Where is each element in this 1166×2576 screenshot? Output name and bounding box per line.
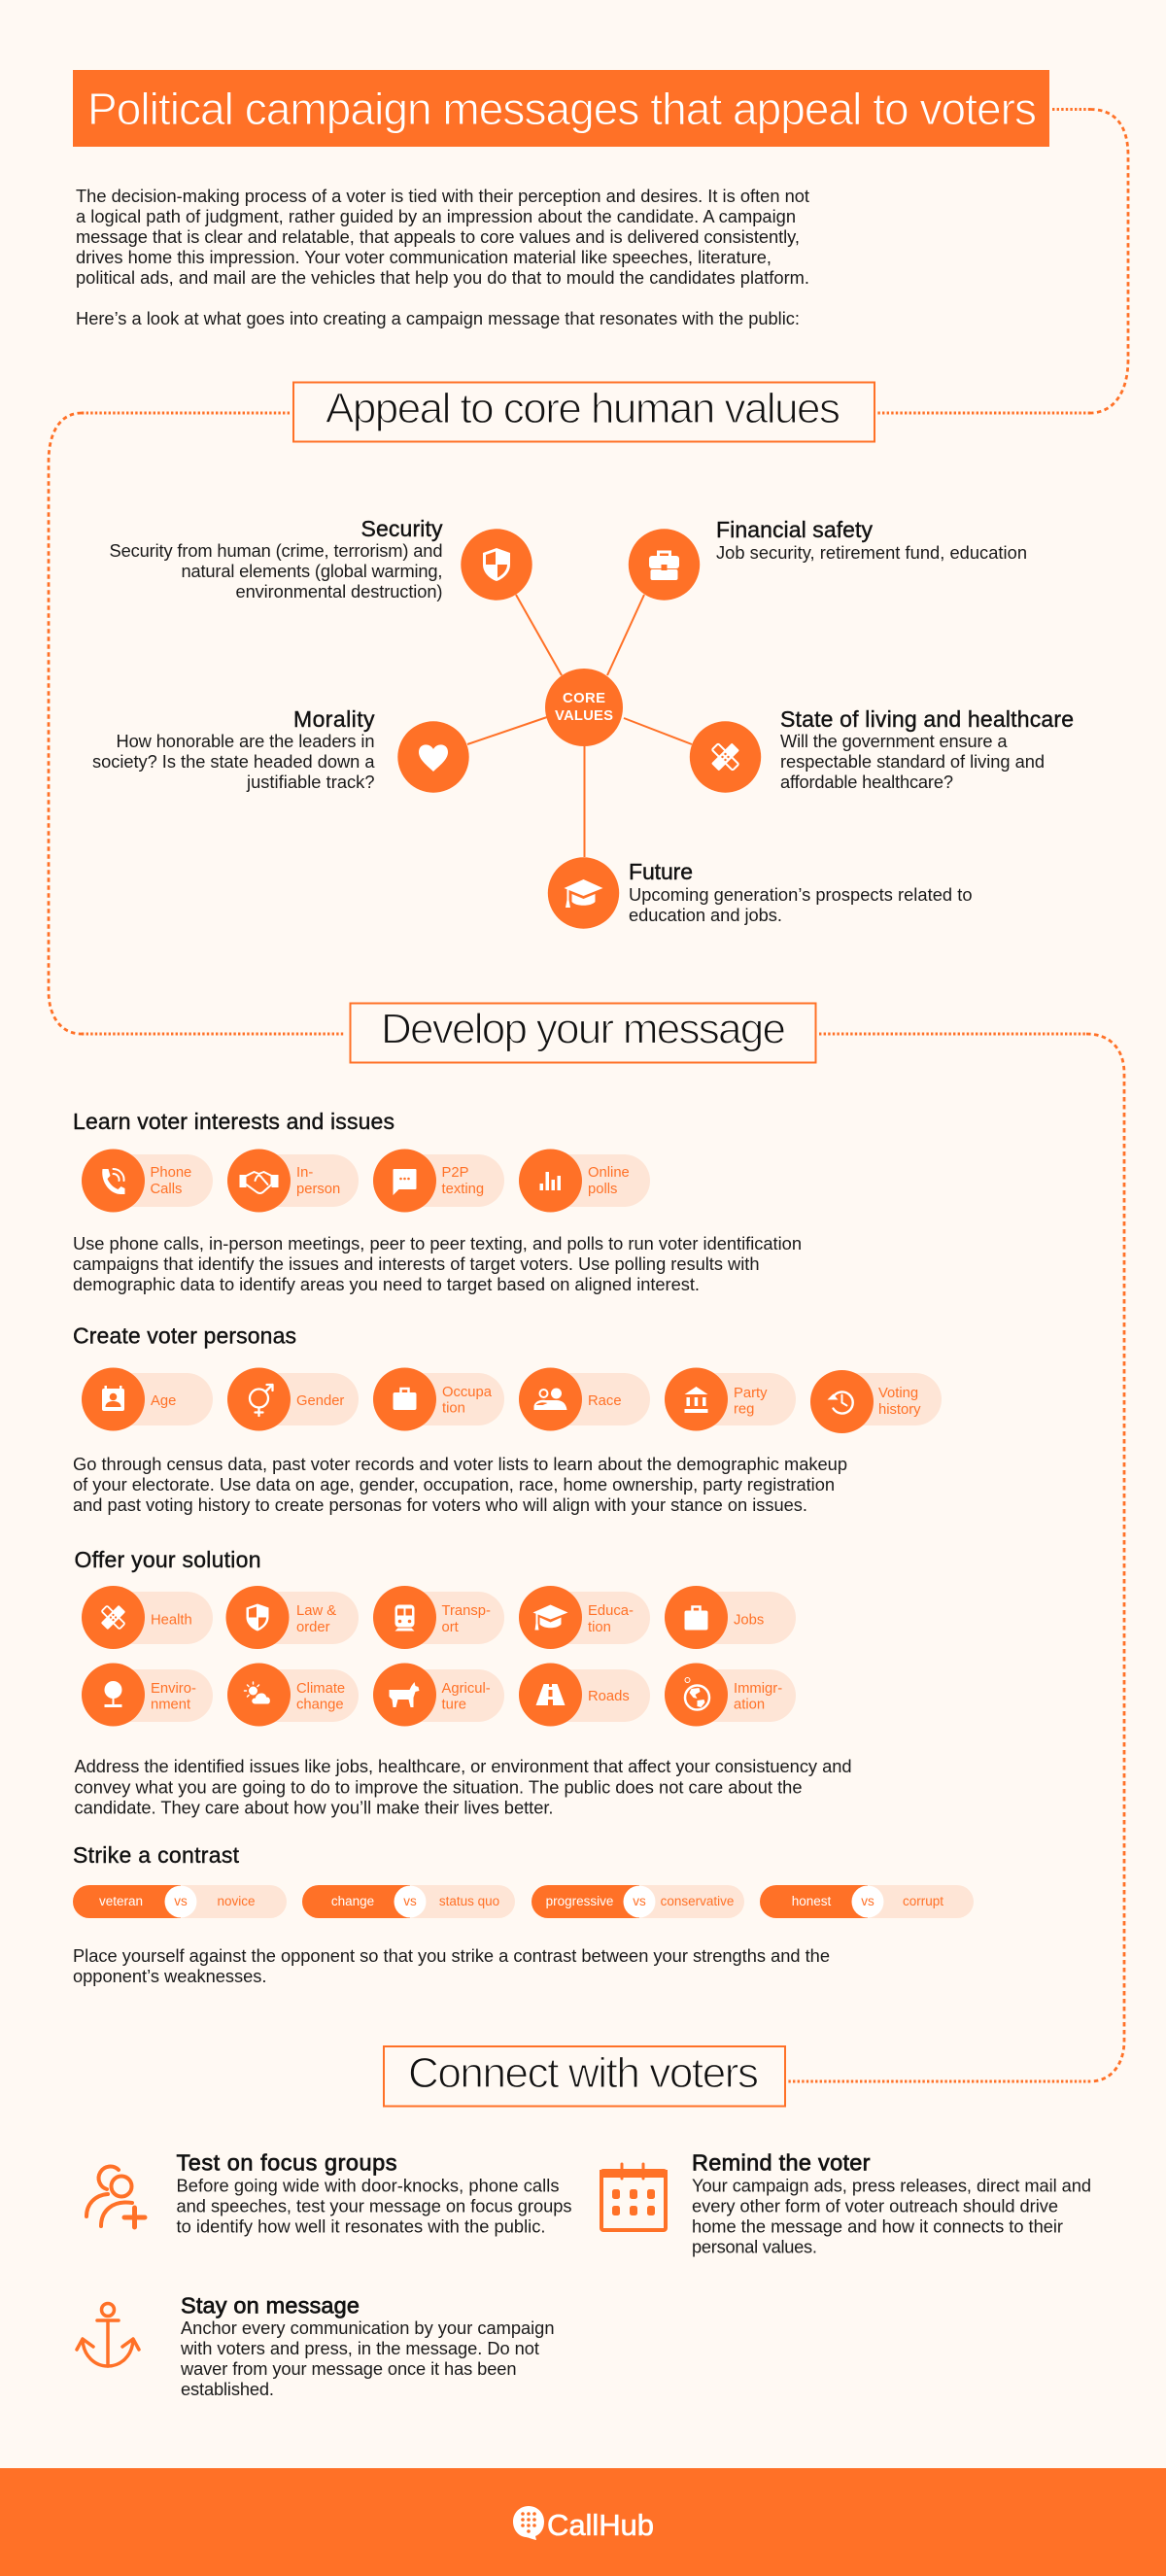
pill: p2p texting: [373, 1149, 504, 1213]
heading: Connect with voters: Connect with voters: [408, 2049, 759, 2097]
title banner: [73, 70, 1049, 147]
text: stay on message: with voters and press, in the message. Do not: [180, 2338, 539, 2358]
text: morality: society? Is the state headed down a: [92, 751, 375, 772]
pill: roads: [519, 1664, 650, 1726]
text: future: [629, 859, 972, 925]
contrast pill: veteran vs novice: veteran: [99, 1894, 143, 1908]
text: stay on message: established.: [181, 2379, 274, 2399]
pill: phone calls: [82, 1149, 213, 1213]
title banner: Political campaign messages that appeal to voters: [87, 84, 1037, 134]
contrast pill: change vs status quo: [302, 1885, 515, 1918]
text: morality: Morality: [293, 706, 375, 732]
section: create voter personas: [73, 1323, 942, 1515]
icon: future graduation cap: [548, 857, 619, 929]
subheading: Learn voter interests and issues: [73, 1109, 394, 1134]
text: financial safety: Financial safety: [716, 517, 873, 542]
contrast pill: change vs status quo: change: [331, 1894, 374, 1908]
hub: core values: [545, 669, 623, 746]
pill: roads: Roads: [588, 1689, 630, 1704]
text: morality: justifiable track?: [246, 772, 375, 792]
pill: law and order: order: [296, 1620, 330, 1635]
pill: agriculture: ture: [441, 1697, 466, 1712]
contrast pill: veteran vs novice: vs: [174, 1894, 188, 1908]
icon: CallHub speech bubble: [513, 2506, 544, 2540]
pill: voting history: [810, 1370, 942, 1433]
contrast pill: progressive vs conservative: [532, 1885, 744, 1918]
paragraph: demographic data to identify areas you need to target based on aligned interest.: [73, 1274, 700, 1294]
pill: in-person: person: [296, 1182, 340, 1197]
section: offer your solution: [74, 1547, 851, 1817]
text: financial safety: [716, 517, 1027, 563]
hub diagram: core values: [92, 516, 1074, 929]
icon: security shield: [461, 529, 532, 601]
subheading: Strike a contrast: [73, 1842, 240, 1868]
intro text: message that is clear and relatable, that appeals to core values and is delivered consistently,: [76, 226, 800, 247]
section: strike a contrast: [73, 1842, 974, 1986]
pill: p2p texting: texting: [441, 1182, 484, 1197]
pill: age: [82, 1368, 213, 1430]
pill: race: Race: [588, 1393, 622, 1409]
contrast pill: honest vs corrupt: [760, 1885, 974, 1918]
hub: core values: VALUES: [555, 708, 613, 724]
text: security: [109, 516, 443, 601]
text: stay on message: [180, 2293, 554, 2399]
pill: immigration: ation: [734, 1697, 765, 1712]
text: test on focus groups: Before going wide with door-knocks, phone calls: [177, 2175, 560, 2196]
pill: health: [82, 1586, 213, 1649]
pill: transport: [373, 1586, 504, 1649]
pill: party registration: Party: [734, 1386, 768, 1401]
text: morality: How honorable are the leaders in: [117, 731, 375, 751]
connector: title to core values heading: [877, 109, 1128, 413]
heading: Connect with voters: [384, 2046, 785, 2107]
pill: immigration: [665, 1664, 796, 1726]
contrast pill: change vs status quo: status quo: [439, 1894, 499, 1908]
pill: phone calls: Phone: [150, 1165, 191, 1181]
pill: online polls: [519, 1149, 650, 1213]
pill: gender: [227, 1368, 359, 1430]
pill: law and order: Law &: [296, 1603, 336, 1619]
pill: climate change: Climate: [296, 1681, 345, 1697]
text: test on focus groups: Test on focus groups: [177, 2149, 396, 2175]
text: remind the voter: home the message and how it connects to their: [692, 2215, 1063, 2237]
connector: core values to develop heading: [49, 413, 344, 1034]
section: connect with voters: [77, 2149, 1091, 2399]
text: morality: [92, 706, 375, 792]
paragraph: campaigns that identify the issues and interests of target voters. Use polling results with: [73, 1254, 760, 1274]
contrast pill: honest vs corrupt: corrupt: [903, 1894, 943, 1908]
pill: in-person: [227, 1149, 359, 1213]
text: remind the voter: personal values.: [692, 2237, 817, 2256]
pill: party registration: reg: [734, 1401, 754, 1417]
contrast pill: progressive vs conservative: conservative: [661, 1894, 734, 1908]
paragraph: [73, 1945, 830, 1986]
pill: environment: [82, 1664, 213, 1726]
icon: calendar: [600, 2164, 668, 2230]
intro text: The decision-making process of a voter is tied with their perception and desires. It is often not: [76, 186, 809, 206]
contrast pill: progressive vs conservative: progressive: [546, 1894, 613, 1908]
pill: transport: Transp-: [441, 1603, 491, 1619]
pill: immigration: Immigr-: [734, 1681, 782, 1697]
pill: p2p texting: P2P: [441, 1165, 469, 1181]
contrast pill: veteran vs novice: [73, 1885, 287, 1918]
text: stay on message: waver from your message once it has been: [180, 2358, 517, 2379]
intro text: Here’s a look at what goes into creating a campaign message that resonates with the public:: [76, 308, 800, 328]
text: state of living and healthcare: [780, 706, 1074, 792]
text: security: natural elements (global warming,: [181, 561, 443, 581]
contrast pill: honest vs corrupt: vs: [861, 1894, 874, 1908]
pill: age: Age: [151, 1393, 176, 1409]
text: security: environmental destruction): [235, 581, 443, 601]
text: state of living and healthcare: affordable healthcare?: [780, 772, 953, 792]
pill: voting history: Voting: [878, 1386, 918, 1401]
intro text: political ads, and mail are the vehicles that help you do that to mould the candidates platform.: [76, 267, 809, 288]
section: learn voter interests: [73, 1109, 802, 1294]
paragraph: [73, 1454, 847, 1515]
spokes: [467, 595, 692, 857]
intro text: [76, 186, 809, 328]
subheading: Create voter personas: [73, 1323, 296, 1349]
text: security: Security from human (crime, terrorism) and: [109, 540, 443, 561]
text: stay on message: Stay on message: [181, 2293, 360, 2318]
text: future: education and jobs.: [629, 905, 782, 925]
pill: law and order: [225, 1586, 359, 1649]
text: state of living and healthcare: Will the government ensure a: [780, 731, 1008, 751]
icon: healthcare bandage: [690, 721, 761, 793]
text: test on focus groups: to identify how well it resonates with the public.: [177, 2215, 546, 2237]
text: test on focus groups: and speeches, test your message on focus groups: [177, 2196, 571, 2215]
connector: develop to connect heading: [787, 1034, 1124, 2081]
text: test on focus groups: [177, 2149, 571, 2237]
pill: online polls: polls: [588, 1182, 617, 1197]
pill: environment: nment: [151, 1697, 190, 1712]
pill: gender: Gender: [296, 1393, 344, 1409]
icon: morality heart: [397, 721, 469, 793]
pill: in-person: In-: [296, 1165, 313, 1181]
logo wordmark: CallHub: [547, 2508, 654, 2542]
paragraph: opponent’s weaknesses.: [73, 1966, 266, 1986]
contrast pill: veteran vs novice: novice: [217, 1894, 256, 1908]
heading: Develop your message: Develop your message: [381, 1005, 786, 1053]
paragraph: candidate. They care about how you’ll make their lives better.: [74, 1798, 554, 1817]
text: stay on message: Anchor every communication by your campaign: [181, 2318, 554, 2338]
pill: climate change: [227, 1664, 359, 1726]
text: future: Upcoming generation’s prospects related to: [629, 884, 972, 905]
pill: online polls: Online: [588, 1165, 630, 1181]
pill: race: [519, 1368, 650, 1430]
paragraph: of your electorate. Use data on age, gender, occupation, race, home ownership, party registration: [73, 1474, 835, 1494]
text: remind the voter: every other form of voter outreach should drive: [692, 2196, 1058, 2215]
contrast pill: progressive vs conservative: vs: [633, 1894, 646, 1908]
hub: core values: CORE: [563, 691, 605, 706]
paragraph: convey what you are going to do to improve the situation. The public does not care about the: [74, 1776, 803, 1798]
pill: agriculture: Agricul-: [441, 1681, 491, 1697]
icon: anchor: [77, 2303, 139, 2366]
pill: climate change: change: [296, 1697, 344, 1712]
pill: education: [519, 1586, 650, 1649]
intro text: drives home this impression. Your voter communication material like speeches, literature,: [76, 247, 772, 267]
icon: financial briefcase: [629, 529, 700, 601]
pill: occupation: Occupa: [442, 1385, 493, 1400]
contrast pill: honest vs corrupt: honest: [792, 1894, 832, 1908]
pill: jobs: [665, 1586, 796, 1649]
pill: party registration: [665, 1368, 796, 1430]
pill: occupation: [373, 1368, 504, 1430]
heading: Appeal to core human values: Appeal to core human values: [326, 385, 840, 432]
intro text: a logical path of judgment, rather guided by an impression about the candidate. A campaign: [76, 206, 796, 226]
text: future: Future: [629, 859, 693, 884]
text: state of living and healthcare: State of living and healthcare: [780, 706, 1074, 732]
text: remind the voter: Remind the voter: [692, 2149, 871, 2175]
pill: education: Educa-: [588, 1603, 634, 1619]
subheading: Offer your solution: [74, 1547, 260, 1572]
pill: health: Health: [151, 1613, 192, 1629]
paragraph: and past voting history to create personas for voters who will align with your stance on issues.: [73, 1494, 807, 1515]
pill: agriculture: [373, 1664, 504, 1726]
pill: education: tion: [588, 1620, 611, 1635]
pill: jobs: Jobs: [734, 1613, 764, 1629]
text: remind the voter: [692, 2149, 1091, 2256]
icon: focus group: [86, 2167, 145, 2227]
pill: voting history: history: [878, 1402, 921, 1418]
paragraph: Use phone calls, in-person meetings, peer to peer texting, and polls to run voter identification: [73, 1233, 802, 1254]
paragraph: Address the identified issues like jobs, healthcare, or environment that affect your consistuency and: [74, 1756, 851, 1776]
pill: occupation: tion: [442, 1401, 465, 1417]
paragraph: Place yourself against the opponent so that you strike a contrast between your strengths and the: [73, 1945, 830, 1966]
paragraph: [74, 1756, 851, 1817]
contrast pill: change vs status quo: vs: [403, 1894, 417, 1908]
paragraph: Go through census data, past voter records and voter lists to learn about the demographic makeup: [73, 1454, 847, 1474]
paragraph: [73, 1233, 802, 1294]
footer band with CallHub logo: [0, 2468, 1166, 2576]
text: remind the voter: Your campaign ads, press releases, direct mail and: [692, 2175, 1091, 2196]
text: financial safety: Job security, retirement fund, education: [716, 542, 1027, 563]
text: state of living and healthcare: respectable standard of living and: [780, 751, 1045, 772]
pill: phone calls: Calls: [150, 1182, 182, 1197]
text: security: Security: [361, 516, 443, 541]
pill: environment: Enviro-: [151, 1681, 196, 1697]
pill: transport: ort: [441, 1620, 459, 1635]
heading: Develop your message: [350, 1003, 816, 1063]
